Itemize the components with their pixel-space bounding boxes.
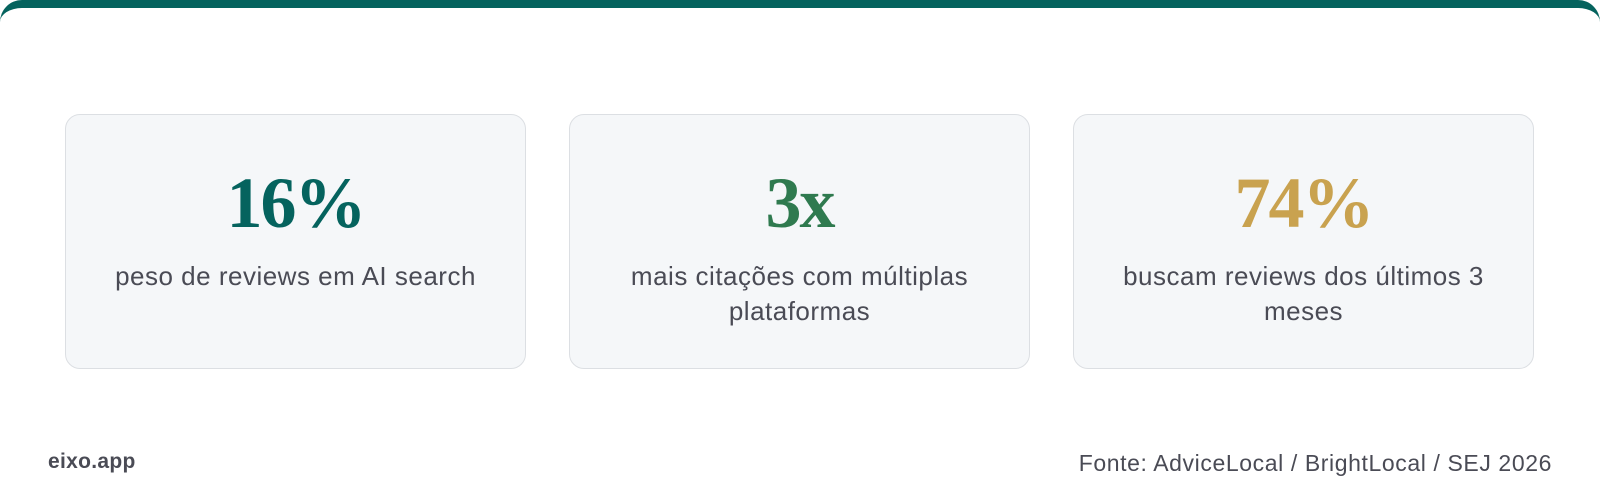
label: peso de reviews: peso de reviews em AI search [115, 261, 476, 291]
number: 74%: 74% [1234, 163, 1372, 243]
panel: stat 74% [1073, 114, 1534, 369]
label: buscam reviews: buscam reviews dos últimos 3 meses [1123, 261, 1484, 326]
number: 16%: 16% [226, 163, 364, 243]
footer: brand: eixo.app [48, 450, 136, 473]
footer: source: Fonte: AdviceLocal / BrightLocal / SEJ 2026 [1079, 450, 1552, 476]
panel: stat 3x [569, 114, 1030, 369]
number: 3x: 3x [766, 163, 834, 243]
label: mais citações: mais citações com múltiplas plataformas [631, 261, 968, 326]
panel: stat 16% [65, 114, 526, 369]
